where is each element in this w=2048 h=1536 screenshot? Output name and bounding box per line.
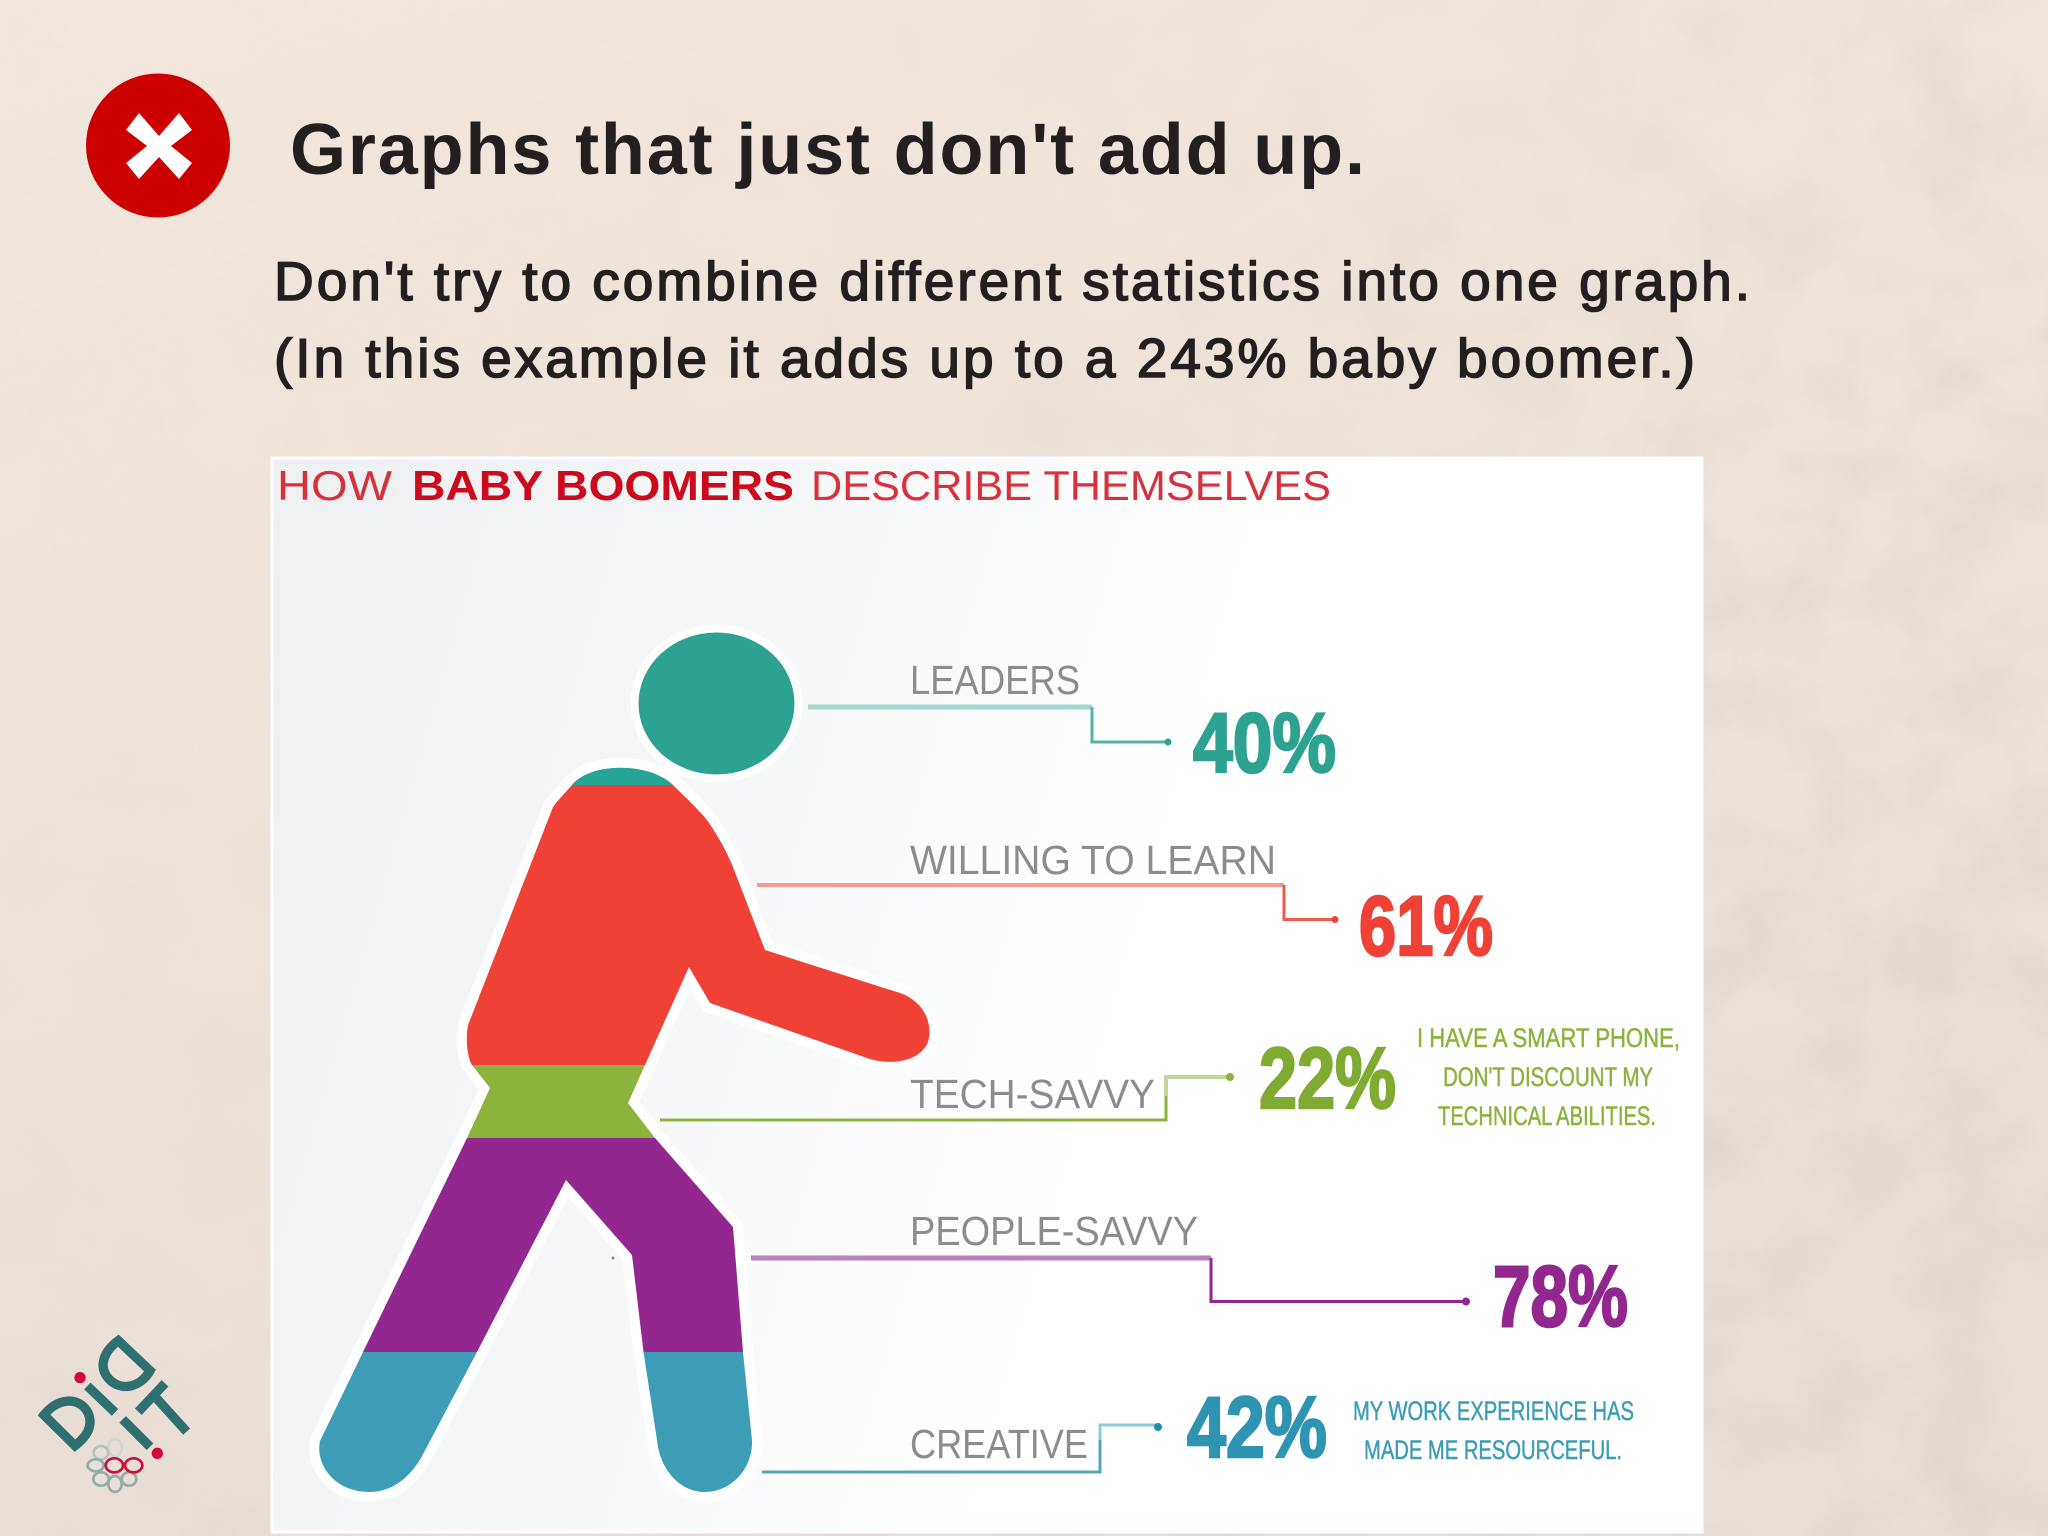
head [638, 632, 794, 774]
value: 42% [1187, 1380, 1327, 1476]
title: Graphs that just don't add up. [290, 110, 1365, 190]
logo letters [44, 1341, 187, 1447]
connector [808, 707, 1172, 746]
quote: MADE ME RESOURCEFUL. [1364, 1435, 1622, 1465]
quote: I HAVE A SMART PHONE, [1417, 1023, 1680, 1053]
connector [762, 1423, 1162, 1472]
panel: baby boomers chart [272, 458, 1702, 1532]
chart heading [277, 462, 1331, 509]
chart heading: HOW [277, 462, 392, 509]
connector [660, 1073, 1234, 1120]
body bands [319, 768, 929, 1492]
row: willing to learn [757, 837, 1493, 973]
quote: TECHNICAL ABILITIES. [1438, 1101, 1656, 1131]
explanatory text: Don't try to combine different statistics into one graph. [274, 250, 1750, 312]
speck near knee [612, 1256, 614, 1260]
chart heading: BABY BOOMERS [412, 462, 794, 509]
quote: DON'T DISCOUNT MY [1443, 1062, 1653, 1092]
value: 40% [1193, 696, 1336, 790]
label: LEADERS [910, 657, 1080, 703]
quote [1417, 1023, 1680, 1131]
logo: Did It [44, 1341, 187, 1492]
label: TECH-SAVVY [910, 1071, 1155, 1117]
quote: MY WORK EXPERIENCE HAS [1353, 1396, 1634, 1426]
chart heading: DESCRIBE THEMSELVES [811, 462, 1331, 509]
figure: segmented person [319, 632, 929, 1492]
value: 22% [1259, 1031, 1396, 1127]
label: WILLING TO LEARN [910, 837, 1276, 883]
logo dots [74, 1372, 163, 1459]
label: PEOPLE-SAVVY [910, 1208, 1198, 1254]
row: people-savvy [751, 1208, 1628, 1345]
row: tech-savvy [660, 1023, 1680, 1131]
logo flower [88, 1439, 136, 1492]
label: CREATIVE [910, 1421, 1088, 1467]
value: 78% [1493, 1249, 1628, 1345]
logo infinity [106, 1458, 142, 1472]
connector [757, 885, 1338, 923]
panel background [272, 458, 1702, 1532]
row: leaders [808, 657, 1336, 790]
explanatory text: (In this example it adds up to a 243% baby boomer.) [274, 327, 1695, 389]
value: 61% [1359, 879, 1493, 973]
row: creative [762, 1380, 1634, 1476]
connector [751, 1258, 1470, 1306]
quote [1353, 1396, 1634, 1465]
icon: red cross [86, 74, 230, 218]
explanatory text [274, 250, 1750, 389]
